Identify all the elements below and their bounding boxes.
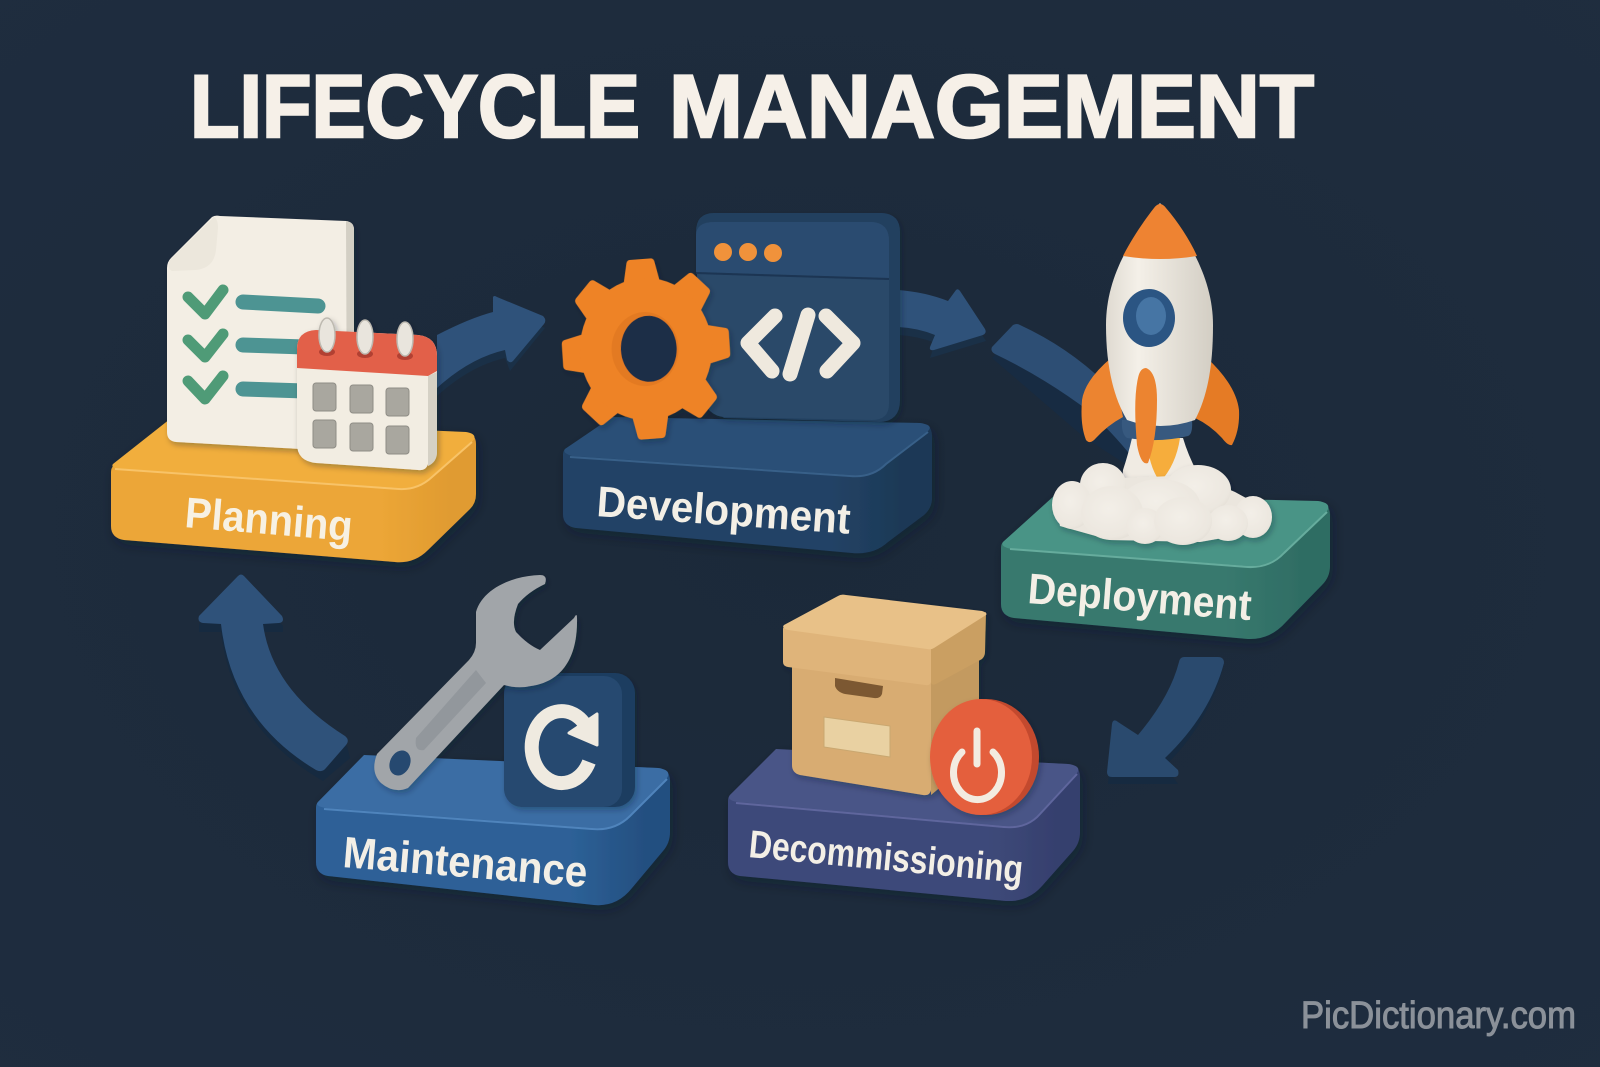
arrow: into deployment (991, 324, 1140, 470)
planning edge highlight (115, 442, 472, 489)
icon: gear (557, 253, 735, 445)
check mark 1 (188, 290, 223, 314)
rocket body (1106, 203, 1213, 426)
icon: rocket (1052, 203, 1272, 545)
calendar ring 2 (357, 320, 373, 354)
panel: decommissioning platform (728, 749, 1080, 901)
check mark 3 (188, 376, 223, 399)
planning top face (112, 419, 474, 488)
icon: calendar (297, 318, 437, 470)
panel: development platform (563, 417, 932, 553)
rocket right fin (1195, 358, 1239, 445)
label: maintenance: Maintenance (341, 828, 589, 897)
calendar ring 3 (397, 322, 413, 356)
title: MANAGEMENT (669, 56, 1314, 156)
box lid side (931, 612, 986, 685)
arrow: planning to development (437, 296, 545, 396)
box lid top (783, 595, 986, 649)
box front (792, 650, 931, 795)
icon: power button (930, 699, 1039, 815)
watermark: PicDictionary.com (1301, 995, 1576, 1037)
icon: checklist document (167, 216, 354, 452)
wrench hole (385, 747, 415, 779)
document folded corner (169, 217, 218, 271)
rocket left fin (1082, 358, 1123, 442)
deployment top face (1002, 495, 1328, 566)
arrow: deployment to decommissioning (1107, 657, 1224, 784)
box handle (835, 678, 883, 698)
rocket window (1123, 289, 1175, 347)
window dots (714, 243, 782, 262)
gear hole rim (609, 310, 681, 388)
label: development: Development (595, 478, 852, 544)
deployment edge highlight (1010, 512, 1327, 567)
check mark 2 (188, 334, 223, 357)
list bar 2 (243, 345, 305, 347)
development top face (564, 417, 930, 475)
code symbol (748, 315, 853, 374)
calendar ring holes (319, 348, 413, 360)
window divider (696, 273, 889, 279)
calendar cells (313, 383, 409, 454)
panel: maintenance platform (316, 755, 670, 905)
maintenance top face (317, 755, 668, 828)
arrow: development to deployment (898, 289, 986, 358)
icon: refresh tile (504, 673, 635, 807)
window header (696, 222, 889, 278)
exhaust column (1120, 438, 1202, 510)
box side (931, 640, 979, 795)
calendar header (297, 330, 437, 376)
wrench slot (416, 670, 486, 750)
calendar side (428, 372, 437, 466)
label: deployment: Deployment (1026, 565, 1253, 630)
panel: planning platform (111, 419, 476, 562)
title: LIFECYCLE (190, 56, 640, 156)
decommissioning top face (729, 749, 1078, 826)
rocket center fin (1135, 368, 1157, 463)
label: decommissioning: Decommissioning (747, 823, 1025, 892)
title (190, 56, 1314, 156)
development edge highlight (570, 432, 928, 476)
icon: archive box (783, 595, 986, 795)
gear hole (619, 314, 679, 384)
smoke cloud (1052, 463, 1272, 545)
refresh arrowhead (569, 714, 597, 745)
power symbol (954, 731, 1002, 800)
box lid front (783, 628, 931, 685)
icon: code window (696, 213, 900, 422)
icon: wrench (374, 575, 577, 790)
rocket nozzle (1122, 420, 1192, 440)
maintenance edge highlight (324, 779, 667, 829)
list bar 3 (243, 389, 305, 391)
decommissioning edge highlight (736, 774, 1077, 827)
list bar 1 (243, 302, 318, 306)
label: planning: Planning (183, 489, 355, 551)
panel: deployment platform (1001, 495, 1330, 639)
document right edge (346, 221, 354, 452)
calendar ring 1 (319, 318, 335, 352)
refresh symbol (532, 711, 589, 783)
flame (1147, 438, 1180, 482)
box label (824, 717, 890, 757)
rocket nose cone (1123, 204, 1197, 259)
rocket window glass (1136, 297, 1166, 335)
arrow: maintenance to planning (198, 574, 350, 781)
